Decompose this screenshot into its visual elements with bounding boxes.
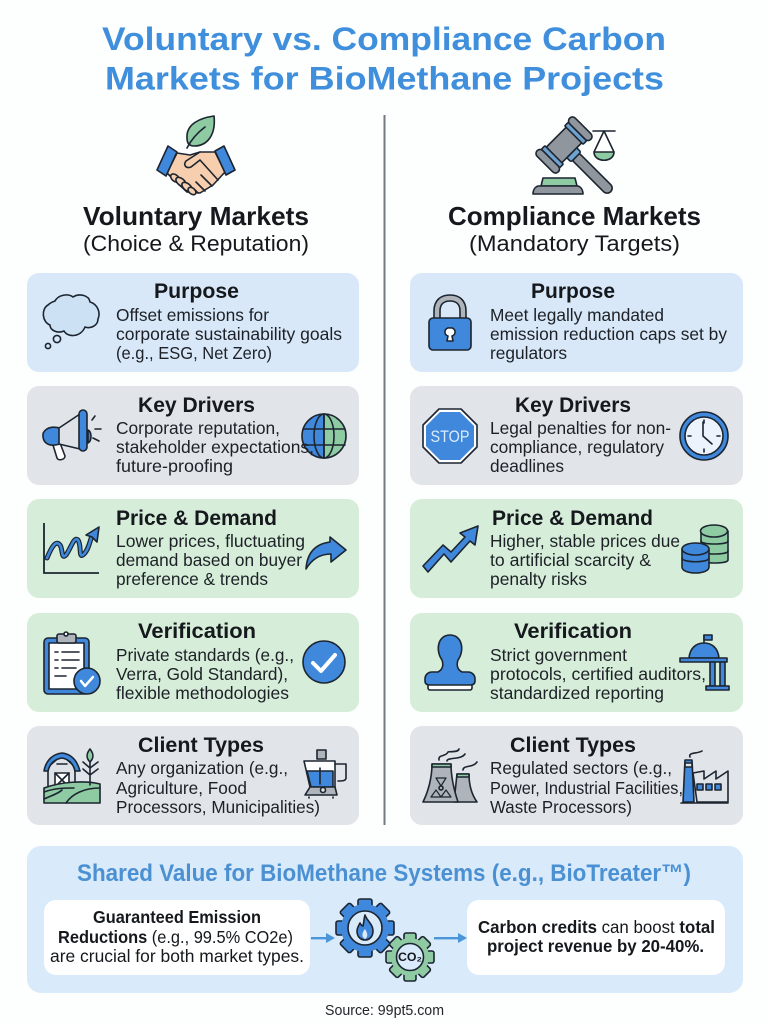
panel: voluntary price and demand bbox=[27, 499, 359, 598]
panel: voluntary client types: Client Types bbox=[138, 734, 264, 757]
shared value heading: Shared Value for BioMethane Systems (e.g., BioTreater™) bbox=[77, 860, 691, 887]
panel: voluntary key drivers: stakeholder expectations, bbox=[116, 437, 314, 457]
arrow: to revenue callout bbox=[434, 933, 467, 943]
callout: carbon credits revenue: Carbon credits can boost total bbox=[478, 917, 715, 937]
icon: clock bbox=[680, 412, 728, 460]
icon: food processor bbox=[304, 750, 346, 798]
icon: flame gear bbox=[336, 899, 394, 957]
panel: compliance verification: standardized reporting bbox=[490, 683, 664, 703]
callout: carbon credits revenue bbox=[467, 900, 725, 975]
panel: voluntary key drivers: future-proofing bbox=[116, 456, 233, 476]
icon: padlock bbox=[429, 295, 471, 350]
panel: voluntary verification: Verification bbox=[138, 620, 256, 643]
icon: fluctuating line chart bbox=[44, 523, 99, 573]
panel: voluntary client types: Agriculture, Food bbox=[116, 778, 247, 798]
callout: guaranteed emission reductions bbox=[44, 900, 310, 975]
panel: voluntary client types: Processors, Municipalities) bbox=[116, 797, 320, 817]
panel: compliance price and demand: Higher, stable prices due bbox=[490, 531, 680, 551]
icon: co2 gear bbox=[386, 933, 434, 981]
icon: check badge bbox=[303, 641, 345, 683]
panel: voluntary verification: Verra, Gold Standard), bbox=[116, 664, 288, 684]
icon: coin stacks bbox=[682, 525, 728, 573]
panel: compliance client types bbox=[410, 726, 743, 825]
panel: voluntary purpose bbox=[27, 273, 359, 372]
heading: voluntary markets bbox=[83, 201, 309, 256]
panel: voluntary purpose: (e.g., ESG, Net Zero) bbox=[116, 343, 272, 363]
panel: compliance key drivers: deadlines bbox=[490, 456, 564, 476]
panel: compliance purpose: regulators bbox=[490, 343, 567, 363]
panel: compliance client types: Power, Industrial Facilities, bbox=[490, 778, 683, 798]
panel: voluntary key drivers bbox=[27, 386, 359, 485]
icon: curved arrow bbox=[306, 537, 346, 569]
panel: compliance key drivers: Legal penalties for non- bbox=[490, 418, 671, 438]
panel: compliance verification: Strict government bbox=[490, 645, 627, 665]
panel: voluntary key drivers: Key Drivers bbox=[138, 394, 255, 417]
callout: guaranteed emission reductions: are crucial for both market types. bbox=[50, 946, 304, 966]
heading: compliance markets: Compliance Markets bbox=[448, 201, 701, 231]
center divider line bbox=[384, 115, 386, 825]
panel: compliance client types: Client Types bbox=[510, 734, 636, 757]
icon: stop sign bbox=[423, 409, 477, 463]
panel: shared value bbox=[27, 846, 743, 993]
icon: rubber stamp bbox=[425, 635, 475, 690]
panel: voluntary purpose: Purpose bbox=[154, 280, 239, 303]
panel: voluntary purpose: Offset emissions for bbox=[116, 305, 269, 325]
panel: voluntary client types bbox=[27, 726, 359, 825]
callout: carbon credits revenue: project revenue by 20-40%. bbox=[487, 936, 704, 956]
heading: voluntary markets: Voluntary Markets bbox=[83, 201, 309, 231]
panel: compliance verification bbox=[410, 613, 743, 712]
callout: guaranteed emission reductions: Reductions (e.g., 99.5% CO2e) bbox=[58, 927, 293, 947]
panel: compliance client types: Regulated sectors (e.g., bbox=[490, 758, 672, 778]
icon: globe bbox=[302, 414, 346, 458]
icon: handshake with leaf bbox=[157, 116, 235, 196]
panel: voluntary client types: Any organization (e.g., bbox=[116, 758, 288, 778]
icon: clipboard with check bbox=[44, 632, 100, 694]
panel: compliance key drivers: compliance, regulatory bbox=[490, 437, 664, 457]
panel: voluntary price and demand: demand based on buyer bbox=[116, 550, 302, 570]
heading: compliance markets: (Mandatory Targets) bbox=[469, 231, 680, 256]
panel: voluntary verification bbox=[27, 613, 359, 712]
panel: voluntary verification: flexible methodologies bbox=[116, 683, 289, 703]
panel: compliance client types: Waste Processors) bbox=[490, 797, 632, 817]
panel: compliance verification: protocols, certified auditors, bbox=[490, 664, 706, 684]
panel: compliance key drivers: Key Drivers bbox=[515, 394, 631, 417]
panel: voluntary price and demand: Price & Demand bbox=[116, 507, 277, 530]
panel: compliance purpose: Meet legally mandated bbox=[490, 305, 664, 325]
icon: cooling towers bbox=[423, 749, 477, 802]
panel: voluntary price and demand: Lower prices, fluctuating bbox=[116, 531, 305, 551]
title bbox=[102, 21, 666, 96]
panel: voluntary verification: Private standards (e.g., bbox=[116, 645, 294, 665]
heading: voluntary markets: (Choice & Reputation) bbox=[83, 231, 309, 256]
panel: compliance price and demand: to artificial scarcity & bbox=[490, 550, 651, 570]
heading: compliance markets bbox=[448, 201, 701, 256]
callout: guaranteed emission reductions: Guaranteed Emission bbox=[93, 907, 261, 927]
icon: co2 gear: CO₂ bbox=[398, 950, 422, 964]
panel: voluntary purpose: corporate sustainability goals bbox=[116, 324, 342, 344]
panel: compliance purpose: Purpose bbox=[531, 280, 615, 303]
icon: megaphone bbox=[43, 410, 101, 460]
panel: compliance verification: Verification bbox=[514, 620, 632, 643]
panel: voluntary price and demand: preference & trends bbox=[116, 569, 268, 589]
icon: factory bbox=[681, 751, 728, 803]
panel: compliance purpose bbox=[410, 273, 743, 372]
icon: stop sign: STOP bbox=[430, 427, 470, 446]
icon: barn and fields bbox=[44, 749, 100, 803]
title: Markets for BioMethane Projects bbox=[105, 60, 664, 96]
panel: compliance purpose: emission reduction caps set by bbox=[490, 324, 727, 344]
title: Voluntary vs. Compliance Carbon bbox=[102, 21, 666, 57]
icon: gavel and scales bbox=[533, 115, 630, 211]
panel: voluntary key drivers: Corporate reputation, bbox=[116, 418, 280, 438]
panel: compliance key drivers bbox=[410, 386, 743, 485]
panel: compliance price and demand bbox=[410, 499, 743, 598]
panel: compliance price and demand: penalty risks bbox=[490, 569, 587, 589]
icon: rising arrow bbox=[423, 526, 478, 572]
source line: Source: 99pt5.com bbox=[325, 1002, 444, 1019]
panel: compliance price and demand: Price & Demand bbox=[492, 507, 653, 530]
arrow: to gears bbox=[311, 933, 335, 943]
icon: thought cloud bbox=[43, 295, 99, 349]
icon: government building bbox=[680, 635, 729, 690]
